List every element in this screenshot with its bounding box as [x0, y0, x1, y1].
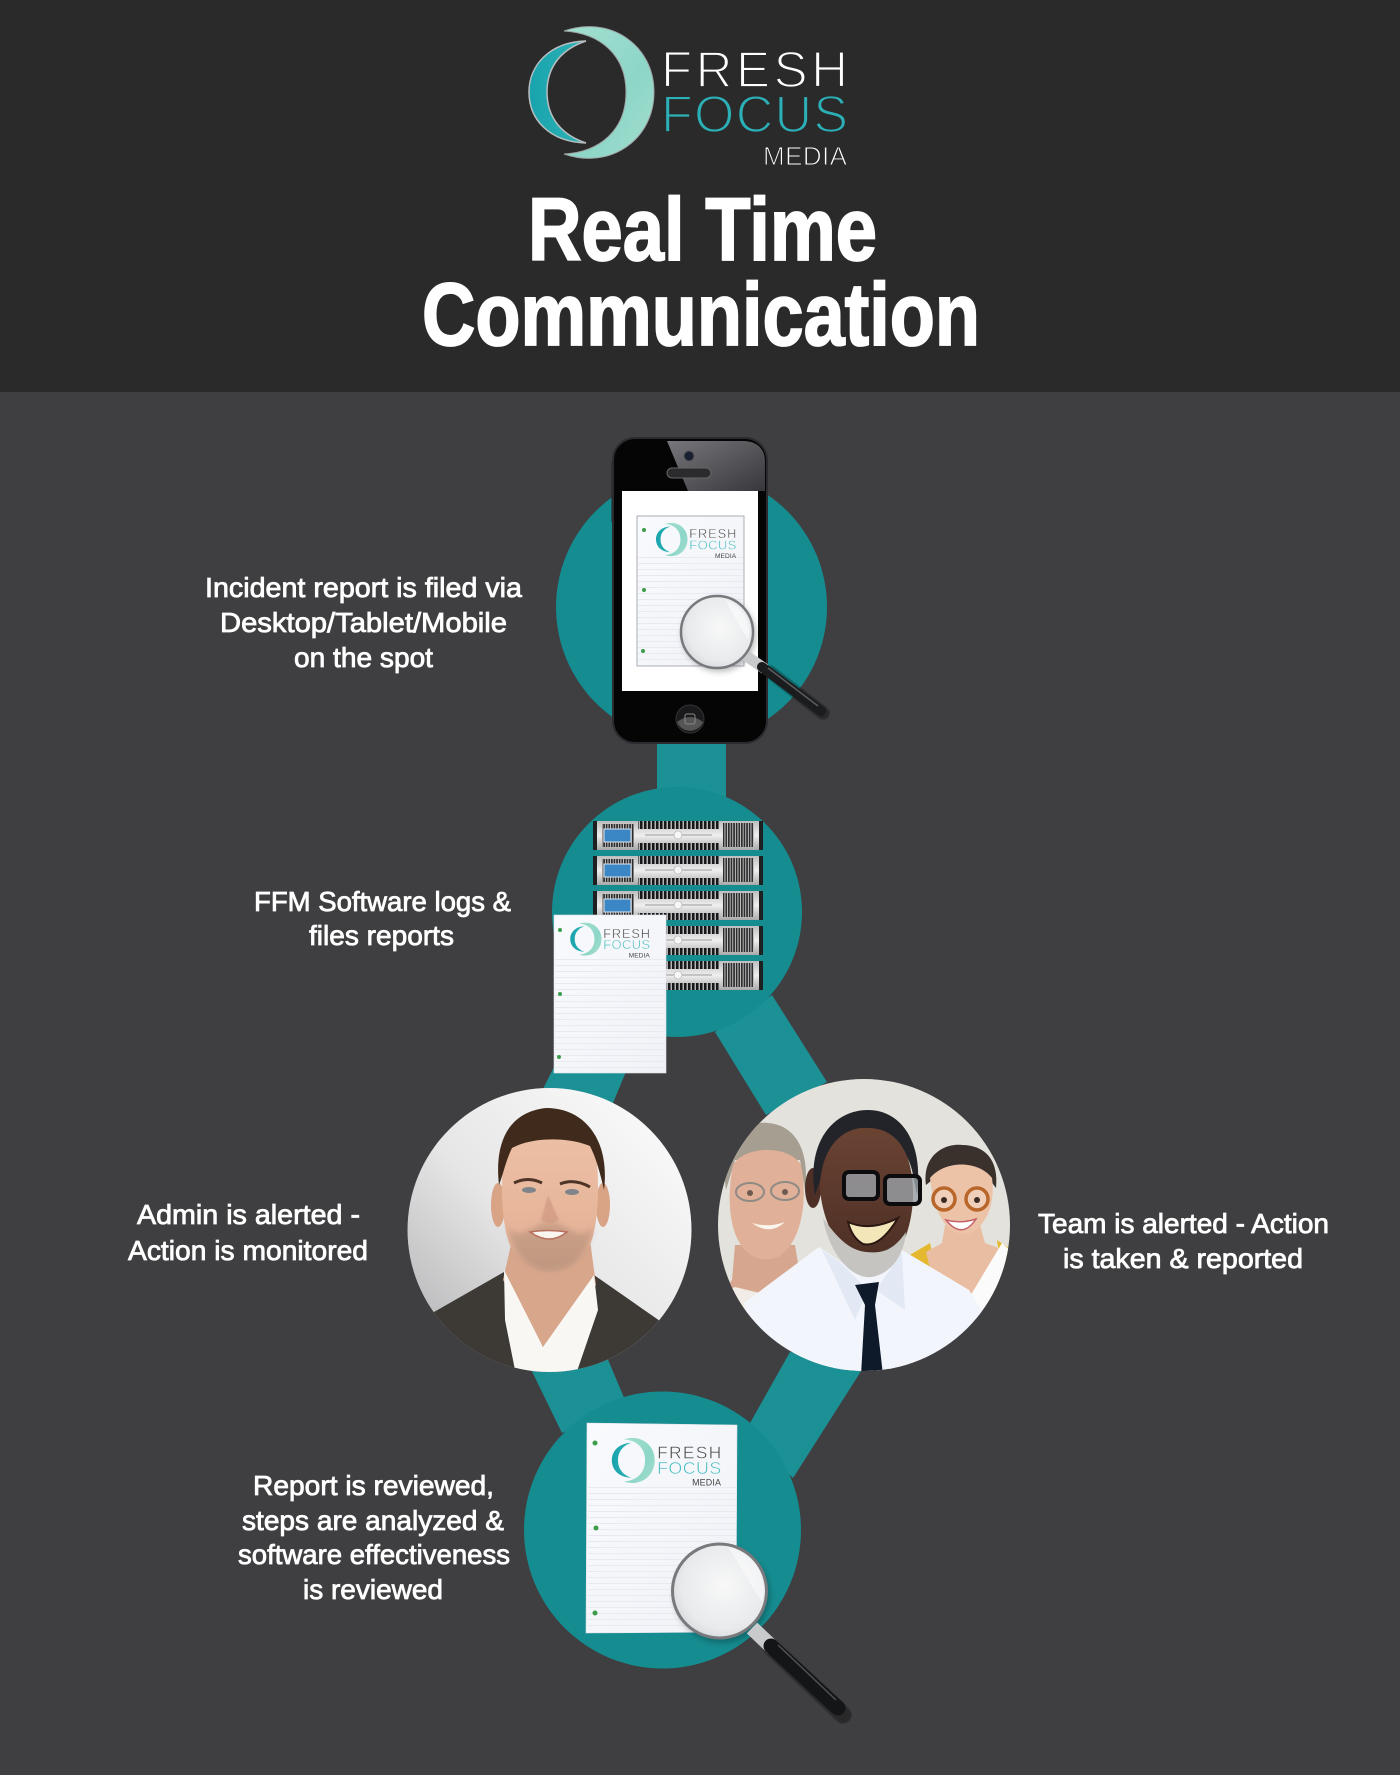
- icon: report on phone screen: MEDIA: [715, 553, 737, 560]
- icon: server rack: [593, 821, 763, 990]
- step 2 caption: [254, 886, 511, 951]
- logo: FRESH: [661, 41, 848, 98]
- woman: [910, 1144, 1008, 1320]
- step 2: servers on teal circle: [552, 787, 802, 1073]
- icon: filed report: [554, 915, 666, 1073]
- step 4 caption: software effectiveness: [238, 1539, 510, 1570]
- step 1: phone on teal circle: [556, 438, 827, 743]
- icon: report on phone screen: FOCUS: [689, 537, 737, 552]
- photo: admin: [408, 1088, 692, 1372]
- title: [422, 179, 980, 364]
- step 2 caption: FFM Software logs &: [254, 886, 511, 917]
- step 4 caption: is reviewed: [303, 1574, 443, 1605]
- icon: report page: FOCUS: [657, 1458, 721, 1478]
- step 4 caption: [238, 1470, 510, 1605]
- title: Real Time: [528, 179, 877, 279]
- step 3a caption: [128, 1199, 368, 1266]
- step 4 caption: steps are analyzed &: [242, 1505, 504, 1536]
- icon: filed report: FOCUS: [603, 937, 650, 952]
- older man: [725, 1122, 806, 1320]
- icon: report on phone screen: [637, 516, 744, 666]
- step 3a caption: Admin is alerted -: [137, 1199, 360, 1230]
- step 3b caption: is taken & reported: [1063, 1243, 1303, 1274]
- step 4 caption: Report is reviewed,: [253, 1470, 494, 1501]
- icon: smartphone: [612, 438, 767, 743]
- step 3b caption: Team is alerted - Action: [1038, 1208, 1329, 1239]
- step 1 caption: on the spot: [294, 642, 433, 673]
- logo: [529, 27, 848, 171]
- step 3a caption: Action is monitored: [128, 1235, 368, 1266]
- header band: [0, 0, 1400, 392]
- centre man: [744, 1110, 985, 1380]
- photo: team: [710, 1075, 1020, 1380]
- icon: report page: MEDIA: [692, 1477, 721, 1487]
- title: Communication: [422, 264, 980, 364]
- step 1 caption: Incident report is filed via: [205, 572, 522, 603]
- icon: filed report: FRESH: [603, 926, 650, 941]
- icon: filed report: MEDIA: [629, 952, 650, 959]
- connector bars: [524, 740, 865, 1478]
- logo: FOCUS: [661, 86, 848, 144]
- icon: report on phone screen: FRESH: [689, 526, 736, 541]
- icon: report page: FRESH: [657, 1443, 721, 1463]
- step 2 caption: files reports: [309, 920, 454, 951]
- logo: MEDIA: [763, 141, 848, 171]
- step 4: review on teal circle: [524, 1392, 843, 1715]
- step 1 caption: Desktop/Tablet/Mobile: [220, 607, 507, 638]
- icon: magnifying glass: [681, 596, 823, 713]
- icon: report page: [586, 1423, 737, 1633]
- icon: large magnifying glass: [672, 1544, 843, 1715]
- step 3b caption: [1038, 1208, 1329, 1274]
- step 1 caption: [205, 572, 522, 673]
